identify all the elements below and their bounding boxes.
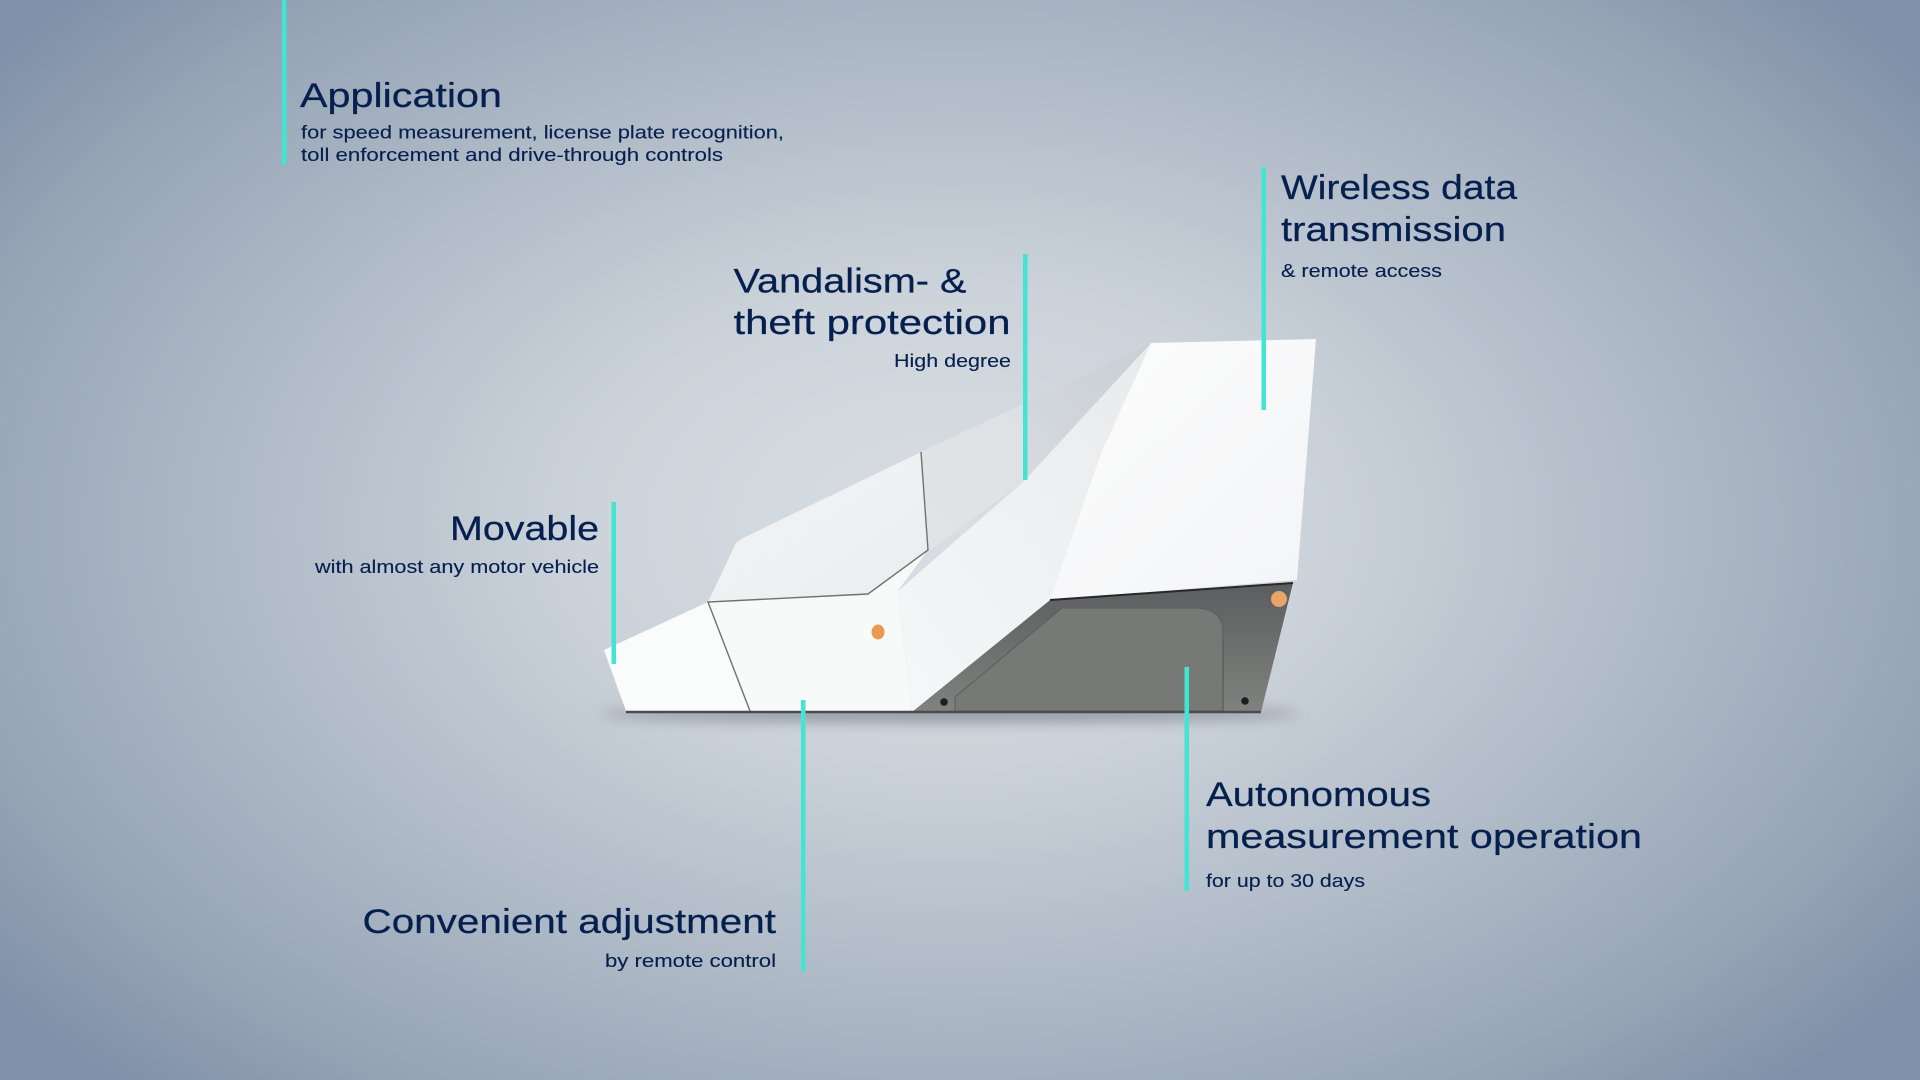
tall rear face xyxy=(1050,339,1316,600)
accent bar xyxy=(801,700,806,971)
heading line two: transmission xyxy=(1281,211,1506,249)
trailer illustration xyxy=(600,339,1316,722)
heading line one: Autonomous xyxy=(1206,776,1431,814)
screw left xyxy=(940,698,948,706)
base edge xyxy=(626,711,1261,713)
callout: movable xyxy=(314,502,616,664)
heading: Movable xyxy=(450,510,599,548)
description: for speed measurement, license plate recognition, xyxy=(301,122,784,142)
dark lower housing xyxy=(912,583,1293,712)
description line two: toll enforcement and drive-through controls xyxy=(301,144,723,165)
screw right xyxy=(1241,697,1249,705)
description: by remote control xyxy=(605,950,776,971)
callout: application xyxy=(282,0,784,165)
accent bar xyxy=(282,0,286,165)
heading: Convenient adjustment xyxy=(362,903,777,941)
panel seam lines xyxy=(708,452,928,711)
heading line one: Wireless data xyxy=(1281,169,1517,207)
description: & remote access xyxy=(1281,260,1442,281)
heading line two: measurement operation xyxy=(1206,818,1642,856)
callout: vandalism and theft protection xyxy=(734,254,1028,480)
roof shaded face xyxy=(921,343,1151,552)
accent bar xyxy=(1184,667,1189,891)
description: with almost any motor vehicle xyxy=(314,556,599,577)
heading line one: Vandalism- & xyxy=(734,262,967,300)
heading: Application xyxy=(300,77,502,115)
door divider right xyxy=(1222,640,1224,711)
orange reflector front xyxy=(872,624,884,640)
accent bar xyxy=(612,502,616,664)
description: High degree xyxy=(894,350,1011,371)
callout: convenient adjustment xyxy=(362,700,806,971)
upper front panel xyxy=(708,452,928,602)
orange reflector rear xyxy=(1271,591,1287,607)
heading line two: theft protection xyxy=(734,304,1010,342)
housing top edge xyxy=(1050,583,1293,600)
nose panel xyxy=(604,602,750,711)
accent bar xyxy=(1262,167,1266,410)
callout: autonomous measurement operation xyxy=(1184,667,1642,891)
lower door panel xyxy=(708,550,928,712)
callout: wireless data transmission xyxy=(1262,167,1517,410)
sliver beside upper panel xyxy=(921,403,1025,552)
description: for up to 30 days xyxy=(1206,870,1365,891)
inner access panel xyxy=(955,608,1223,711)
ground shadow xyxy=(600,706,1300,722)
accent bar xyxy=(1023,254,1028,480)
middle slanted face xyxy=(897,343,1151,712)
